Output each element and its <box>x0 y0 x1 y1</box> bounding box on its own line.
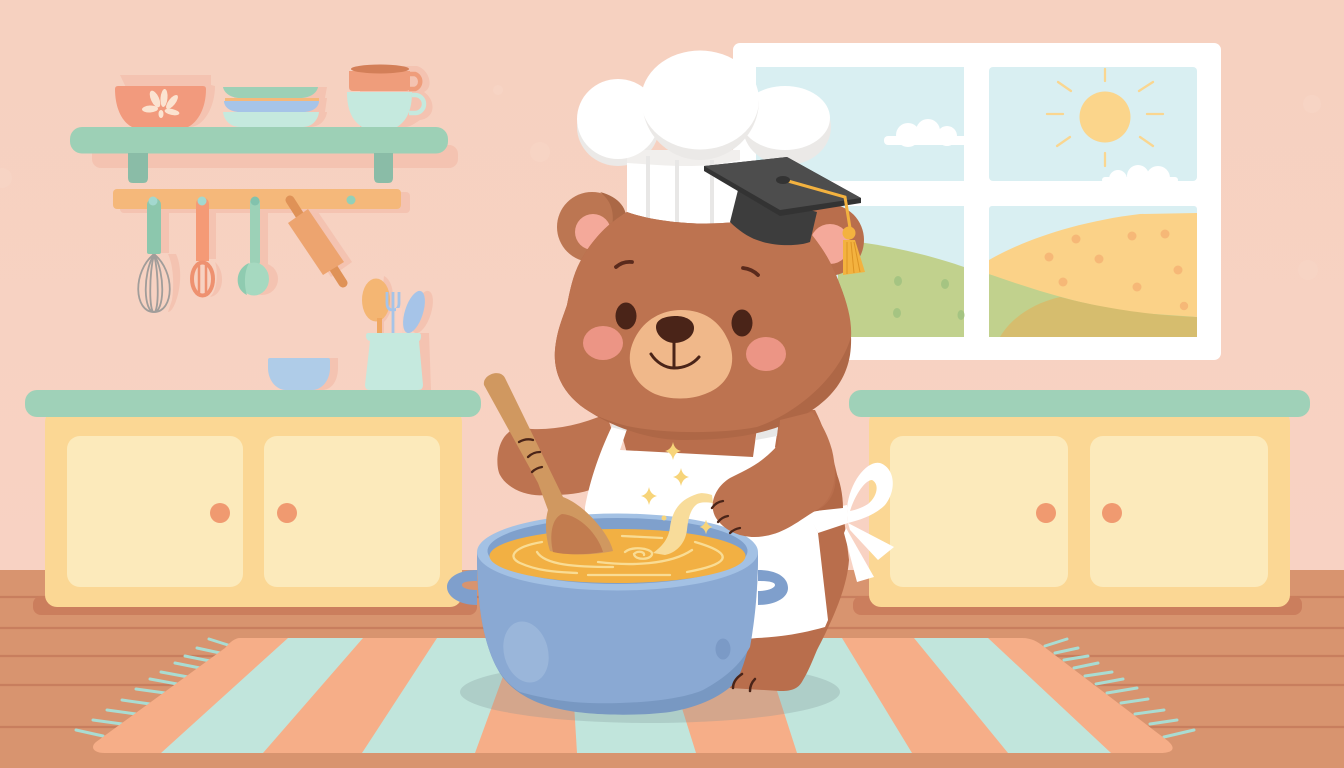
wooden spoon <box>484 373 613 554</box>
bear head <box>555 212 851 440</box>
right counter <box>849 390 1310 615</box>
slotted ladle <box>192 196 213 296</box>
cups <box>347 64 424 127</box>
pot shadow <box>460 661 840 723</box>
utensil rail and hanging tools <box>113 189 401 312</box>
utensil jar <box>362 276 437 390</box>
soup <box>490 529 746 583</box>
bear ears <box>557 192 864 276</box>
apron bow <box>807 463 894 582</box>
foot claws <box>733 674 755 691</box>
floor <box>0 570 1344 768</box>
small bowl <box>268 358 338 390</box>
graduation cap <box>704 157 865 275</box>
shelf board <box>70 127 448 154</box>
hills right <box>989 213 1197 337</box>
shelf brackets <box>128 153 393 183</box>
pot highlight <box>497 616 555 688</box>
soup swirls <box>513 536 723 575</box>
spoon <box>238 196 269 296</box>
wall specks <box>0 85 1321 280</box>
right handle <box>758 570 788 605</box>
rim <box>477 514 758 590</box>
nose <box>656 316 694 343</box>
window <box>733 43 1221 360</box>
left counter <box>25 390 481 615</box>
mouth <box>651 343 699 368</box>
rolling pin <box>288 200 352 283</box>
rail peg <box>346 196 356 204</box>
whisk <box>138 196 170 312</box>
wall <box>0 0 1344 572</box>
brows <box>616 262 632 267</box>
chef hat <box>577 50 831 226</box>
pot <box>447 514 788 715</box>
plates <box>223 87 319 127</box>
eyes <box>616 302 636 330</box>
bowl <box>115 86 206 127</box>
left paw claws <box>519 439 542 472</box>
cheeks <box>583 326 623 360</box>
tool shadows <box>161 209 278 312</box>
left handle <box>447 570 477 605</box>
right paw claws <box>712 501 740 533</box>
muzzle <box>630 310 732 398</box>
sun <box>1047 69 1163 166</box>
pot body <box>477 552 758 715</box>
cloud left <box>884 119 968 147</box>
bear body <box>497 410 894 691</box>
apron <box>585 420 828 650</box>
rug <box>76 638 1194 753</box>
sparkles <box>641 442 712 534</box>
cloud right <box>1102 165 1178 190</box>
hill left <box>838 240 964 337</box>
rising soup ribbon <box>653 493 713 555</box>
shelf with dishes <box>70 64 458 213</box>
shelf shadows <box>92 66 458 213</box>
left arm <box>497 414 612 495</box>
right arm <box>712 412 843 537</box>
